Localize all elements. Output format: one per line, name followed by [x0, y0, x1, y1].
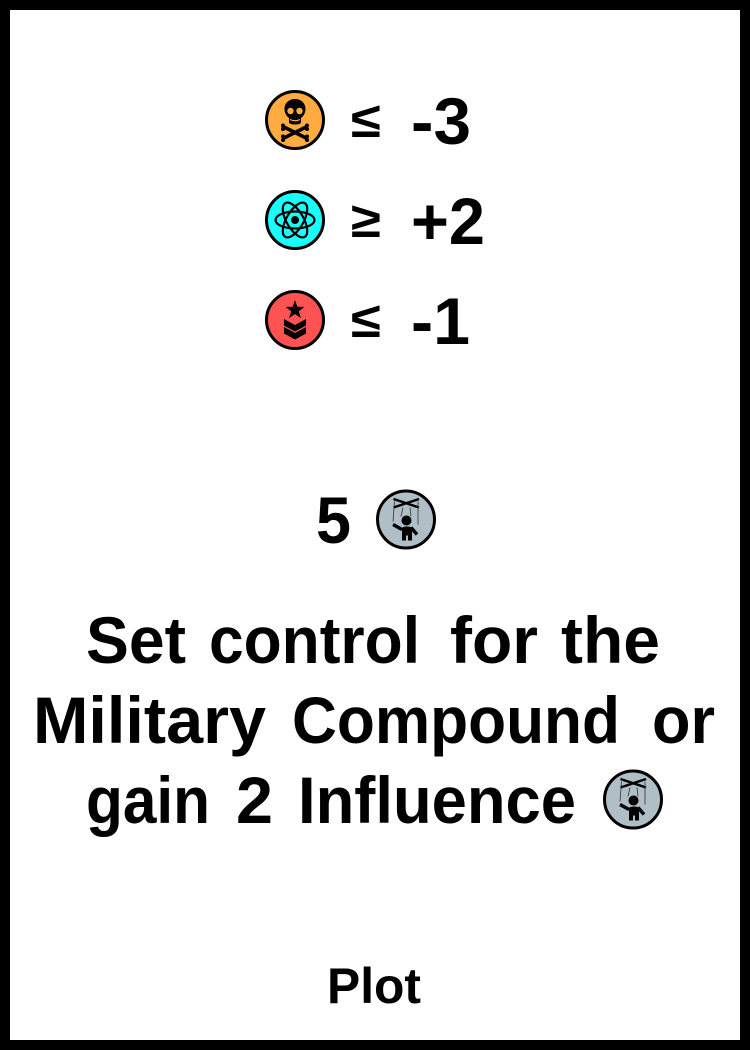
- cost: 5 influence: 5: [316, 483, 351, 557]
- icon: atom: [266, 192, 324, 248]
- effect text: or: [652, 683, 715, 757]
- icon: skull and crossbones: [266, 92, 324, 148]
- effect text: Compound: [292, 683, 620, 757]
- cost: 5 influence: [316, 483, 434, 557]
- effect text: Influence: [298, 763, 576, 837]
- effect text: 2: [236, 763, 273, 837]
- icon: puppet influence: [378, 491, 434, 548]
- icon: puppet influence: [604, 771, 662, 828]
- effect text: the: [561, 603, 660, 677]
- threshold: -3: [351, 84, 471, 158]
- threshold: -3: -3: [411, 84, 471, 158]
- effect text: for: [450, 603, 538, 677]
- threshold: +2: +2: [411, 184, 485, 258]
- threshold: -1: [351, 284, 470, 358]
- threshold: +2: [351, 184, 485, 258]
- card type: Plot: Plot: [327, 958, 421, 1014]
- icon: military rank: [266, 292, 324, 348]
- threshold: -1: ≤: [351, 292, 381, 348]
- threshold: -3: ≤: [351, 92, 381, 148]
- threshold: +2: ≥: [351, 192, 381, 248]
- effect text: control: [209, 603, 420, 677]
- effect text: gain: [86, 763, 210, 837]
- effect text: Set: [86, 603, 186, 677]
- effect text: [33, 603, 715, 837]
- threshold: -1: -1: [411, 284, 470, 358]
- effect text: Military: [33, 683, 266, 757]
